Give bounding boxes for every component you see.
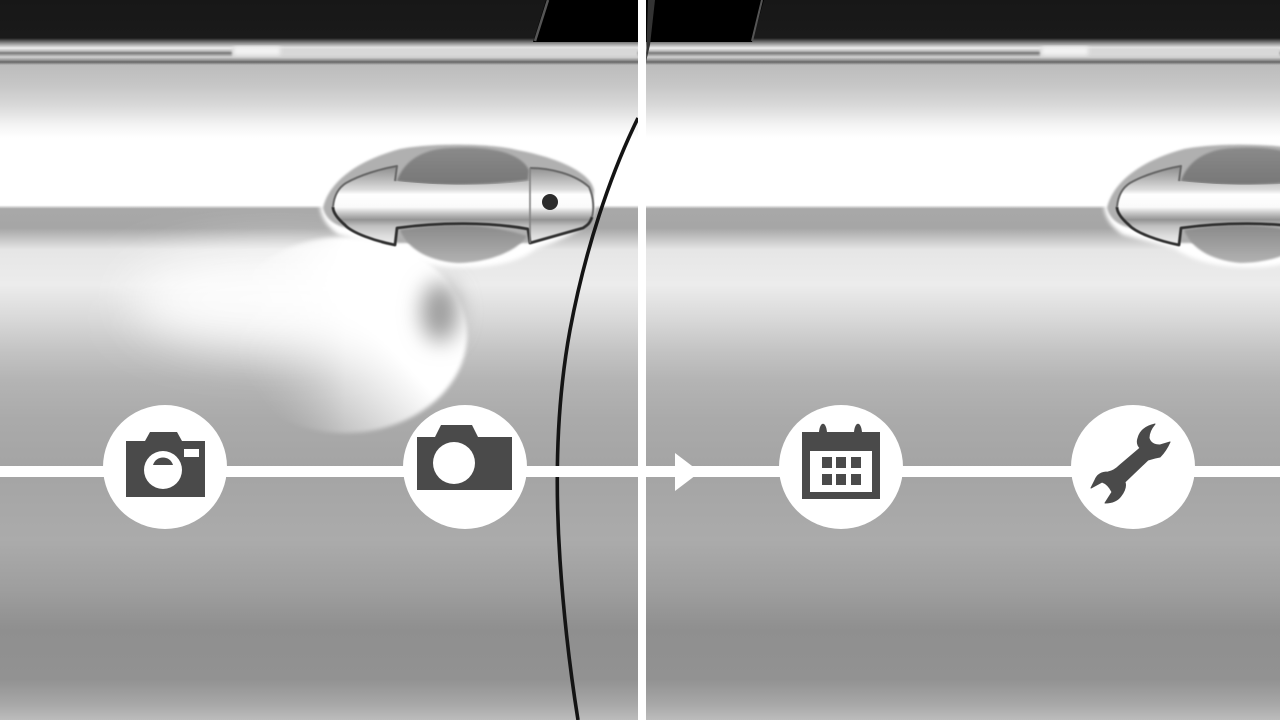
center divider bbox=[638, 0, 646, 720]
panel: after, repaired door bbox=[646, 0, 1280, 720]
icon: wrench bbox=[1071, 405, 1195, 529]
icon: camera bbox=[403, 405, 527, 529]
trim glint bbox=[234, 47, 280, 55]
door surface bbox=[646, 0, 1280, 720]
pillar highlight bbox=[752, 0, 762, 41]
door gap line bbox=[557, 118, 638, 720]
trim highlight bbox=[232, 48, 638, 57]
arrow bbox=[675, 453, 700, 491]
timeline line bbox=[0, 466, 1280, 477]
trim highlight bbox=[1040, 48, 1280, 57]
panel: before, damaged door bbox=[0, 0, 640, 720]
icon: calendar bbox=[779, 405, 903, 529]
door gap edge bbox=[646, 0, 655, 62]
door handle bbox=[1107, 145, 1280, 264]
trim glint bbox=[1042, 47, 1088, 55]
icon: camera with flash bbox=[103, 405, 227, 529]
window pillar bbox=[533, 0, 640, 42]
pillar highlight bbox=[535, 0, 548, 41]
dent bbox=[130, 237, 467, 433]
door handle bbox=[323, 145, 594, 264]
window pillar bbox=[646, 0, 764, 42]
key hole bbox=[542, 194, 558, 210]
door surface bbox=[0, 0, 638, 720]
